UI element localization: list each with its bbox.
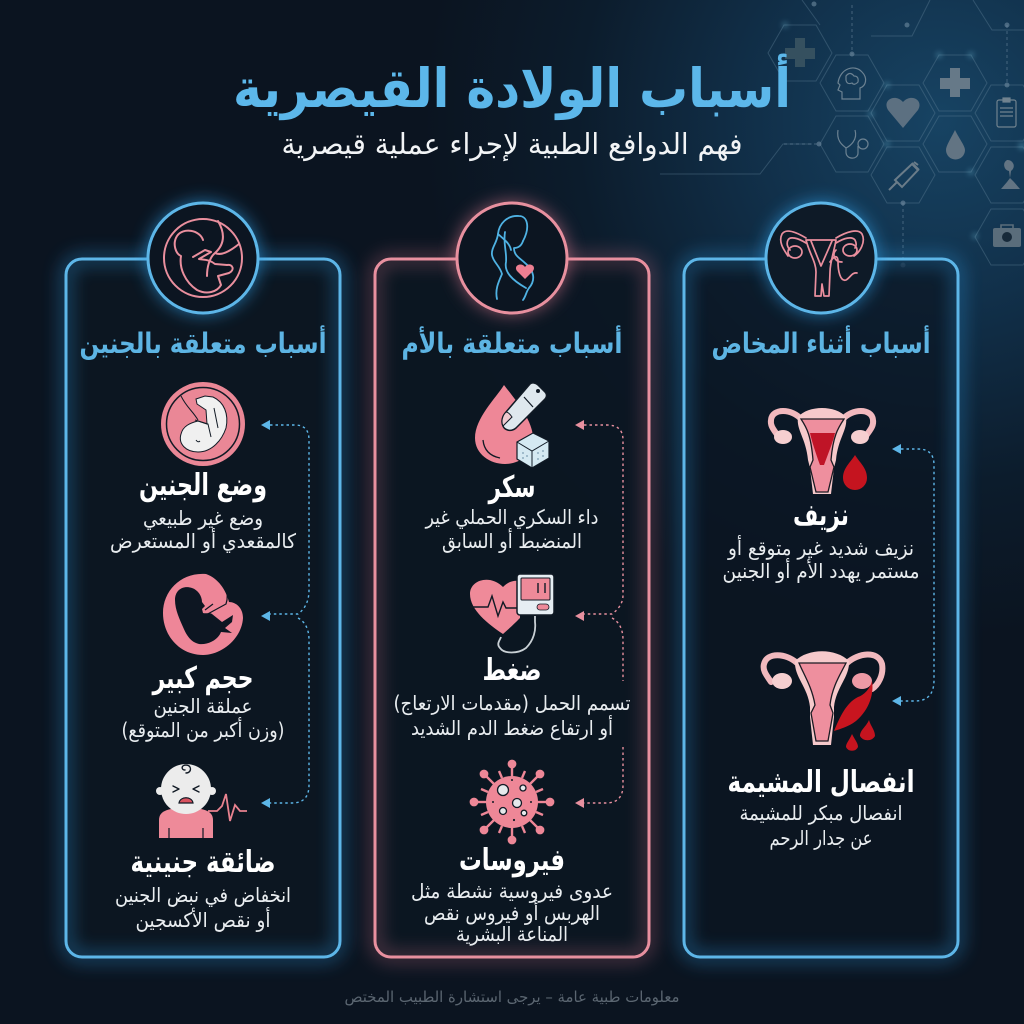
- item: placental abruption: [728, 651, 914, 850]
- icon: virus: [471, 761, 553, 843]
- item description: أو ارتفاع ضغط الدم الشديد: [411, 715, 613, 740]
- item title: ضغط: [482, 653, 542, 688]
- panel badge: uterus line icon: [765, 202, 877, 314]
- icon: blood drops: [846, 720, 875, 751]
- item: fetal distress: [115, 764, 291, 932]
- item description: [411, 879, 613, 946]
- item description: تسمم الحمل (مقدمات الارتعاج): [394, 691, 630, 715]
- icon: background medical kit: [993, 225, 1021, 247]
- item description: الهربس أو فيروس نقص: [424, 900, 600, 925]
- icon: fetus silhouette: [163, 574, 243, 655]
- icon: blood drop: [843, 455, 867, 490]
- icon: background heart: [886, 98, 920, 128]
- item description: انفصال مبكر للمشيمة: [740, 801, 902, 825]
- item description: وضع غير طبيعي: [143, 506, 263, 531]
- item description: داء السكري الحملي غير: [425, 505, 598, 530]
- item title: وضع الجنين: [139, 468, 267, 503]
- panel: causes during labour: [684, 202, 958, 957]
- icon: crying baby with pulse: [156, 764, 247, 838]
- icon: background bulb: [1001, 160, 1020, 189]
- item title: سكر: [487, 470, 536, 505]
- item description: [394, 691, 630, 740]
- icon: blood drop, lancet and sugar cube: [475, 383, 549, 468]
- arrows: maternal flow: [575, 420, 623, 808]
- item title: حجم كبير: [151, 661, 254, 696]
- icon: background brain: [838, 68, 866, 99]
- icon: background syringe: [889, 162, 919, 190]
- icon: uterus with blood drop: [771, 408, 873, 494]
- panel: fetal causes: [66, 202, 340, 957]
- item title: ضائقة جنينية: [130, 845, 276, 880]
- item: large size: [122, 574, 284, 742]
- subtitle: فهم الدوافع الطبية لإجراء عملية قيصرية: [282, 127, 742, 162]
- item title: انفصال المشيمة: [728, 765, 914, 800]
- title: أسباب الولادة القيصرية: [233, 53, 791, 120]
- item description: المناعة البشرية: [456, 922, 568, 946]
- item description: انخفاض في نبض الجنين: [115, 883, 291, 908]
- panel heading: أسباب متعلقة بالجنين: [80, 325, 326, 360]
- panel heading: أسباب أثناء المخاض: [712, 325, 930, 360]
- icon: background plus: [785, 38, 815, 67]
- item description: عن جدار الرحم: [770, 826, 872, 850]
- panel frame: [66, 259, 340, 957]
- item description: [425, 505, 598, 553]
- panel badge: fetus line icon: [147, 202, 259, 314]
- item title: فيروسات: [459, 843, 565, 878]
- arrows: fetal flow: [261, 420, 309, 808]
- background: medical hexagon network: [660, 0, 1024, 268]
- item description: المنضبط أو السابق: [442, 528, 582, 553]
- arrows: labour flow: [892, 444, 934, 706]
- item description: نزيف شديد غير متوقع أو: [727, 535, 914, 560]
- icon: uterus with abruption: [764, 651, 882, 745]
- item: fetal position: [110, 382, 296, 554]
- item: haemorrhage: [722, 408, 920, 583]
- item description: [122, 694, 284, 742]
- icon: heart and blood pressure monitor: [470, 574, 554, 652]
- item: viruses: [411, 761, 613, 946]
- panel heading: أسباب متعلقة بالأم: [402, 325, 622, 360]
- icon: background plus 2: [940, 68, 970, 97]
- item: diabetes: [425, 383, 598, 553]
- item description: كالمقعدي أو المستعرض: [110, 528, 296, 554]
- item: blood pressure: [394, 574, 630, 740]
- footer note: معلومات طبية عامة – يرجى استشارة الطبيب المختص: [344, 988, 680, 1006]
- panel frame: [375, 259, 649, 957]
- item description: [722, 535, 920, 583]
- panel: maternal causes: [375, 202, 649, 957]
- item description: مستمر يهدد الأم أو الجنين: [722, 558, 920, 583]
- item description: (وزن أكبر من المتوقع): [122, 717, 284, 742]
- icon: inverted fetus: [161, 382, 245, 466]
- panel badge: pregnant woman line icon: [456, 202, 568, 314]
- icon: background stethoscope: [838, 130, 868, 158]
- item title: نزيف: [793, 498, 849, 533]
- item description: [110, 506, 296, 554]
- icon: background clipboard: [997, 98, 1016, 127]
- icon: background drop: [946, 130, 965, 160]
- item description: [740, 801, 902, 850]
- item description: [115, 883, 291, 932]
- panel frame: [684, 259, 958, 957]
- item description: أو نقص الأكسجين: [136, 907, 270, 932]
- item description: عملقة الجنين: [154, 694, 252, 718]
- item description: عدوى فيروسية نشطة مثل: [411, 879, 613, 903]
